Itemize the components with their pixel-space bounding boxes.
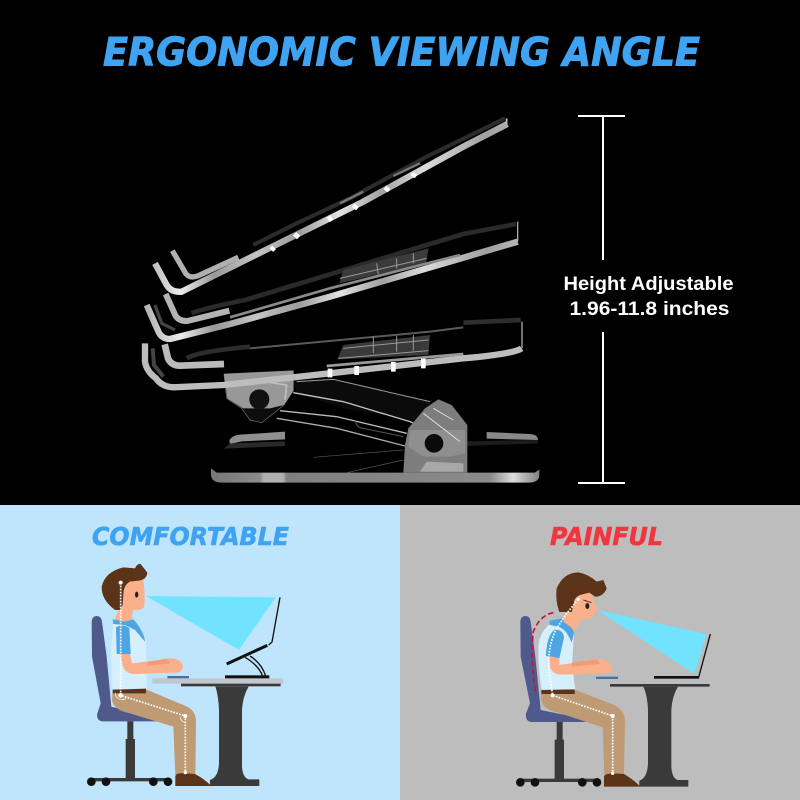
shirt — [111, 619, 147, 689]
base plate — [211, 432, 539, 483]
keyboard — [596, 677, 618, 679]
heading: painful: PAINFUL — [550, 522, 663, 551]
sight cone — [146, 596, 276, 650]
belt — [541, 689, 575, 694]
chair — [87, 616, 172, 786]
panel: comfortable — [0, 505, 400, 800]
low plate position — [145, 320, 522, 387]
sight cone — [597, 610, 707, 674]
high plate position — [155, 118, 507, 292]
heading: comfortable: COMFORTABLE — [92, 522, 289, 551]
product: adjustable acrylic stand in three positions — [145, 118, 539, 483]
illustration: poor posture — [516, 572, 712, 787]
desk — [582, 679, 712, 787]
background: black top section — [0, 0, 800, 505]
height label — [564, 274, 734, 320]
shoe — [175, 773, 211, 786]
trousers — [112, 689, 196, 775]
illustration: correct posture — [87, 564, 283, 786]
title: ERGONOMIC VIEWING ANGLE — [103, 30, 700, 76]
shoe — [604, 773, 640, 787]
posture line — [115, 583, 185, 773]
belt — [113, 689, 146, 693]
laptop on stand — [225, 597, 280, 678]
shirt — [538, 619, 575, 690]
middle plate position — [147, 222, 518, 339]
support arms — [277, 378, 450, 446]
desk — [152, 678, 283, 786]
panel: painful — [400, 505, 800, 800]
chair — [516, 616, 601, 787]
trousers — [541, 690, 625, 775]
height label: Height Adjustable — [564, 274, 734, 295]
keyboard — [167, 676, 189, 678]
laptop — [654, 634, 710, 679]
arm — [549, 656, 612, 675]
posture line — [549, 599, 613, 773]
lower hinge block — [403, 399, 467, 473]
height measurement bracket — [578, 116, 625, 483]
head — [115, 580, 145, 621]
upper hinge block — [224, 371, 293, 423]
head — [563, 592, 597, 631]
height label: 1.96-11.8 inches — [570, 299, 730, 320]
arm — [120, 654, 183, 674]
pain curve — [532, 613, 553, 695]
